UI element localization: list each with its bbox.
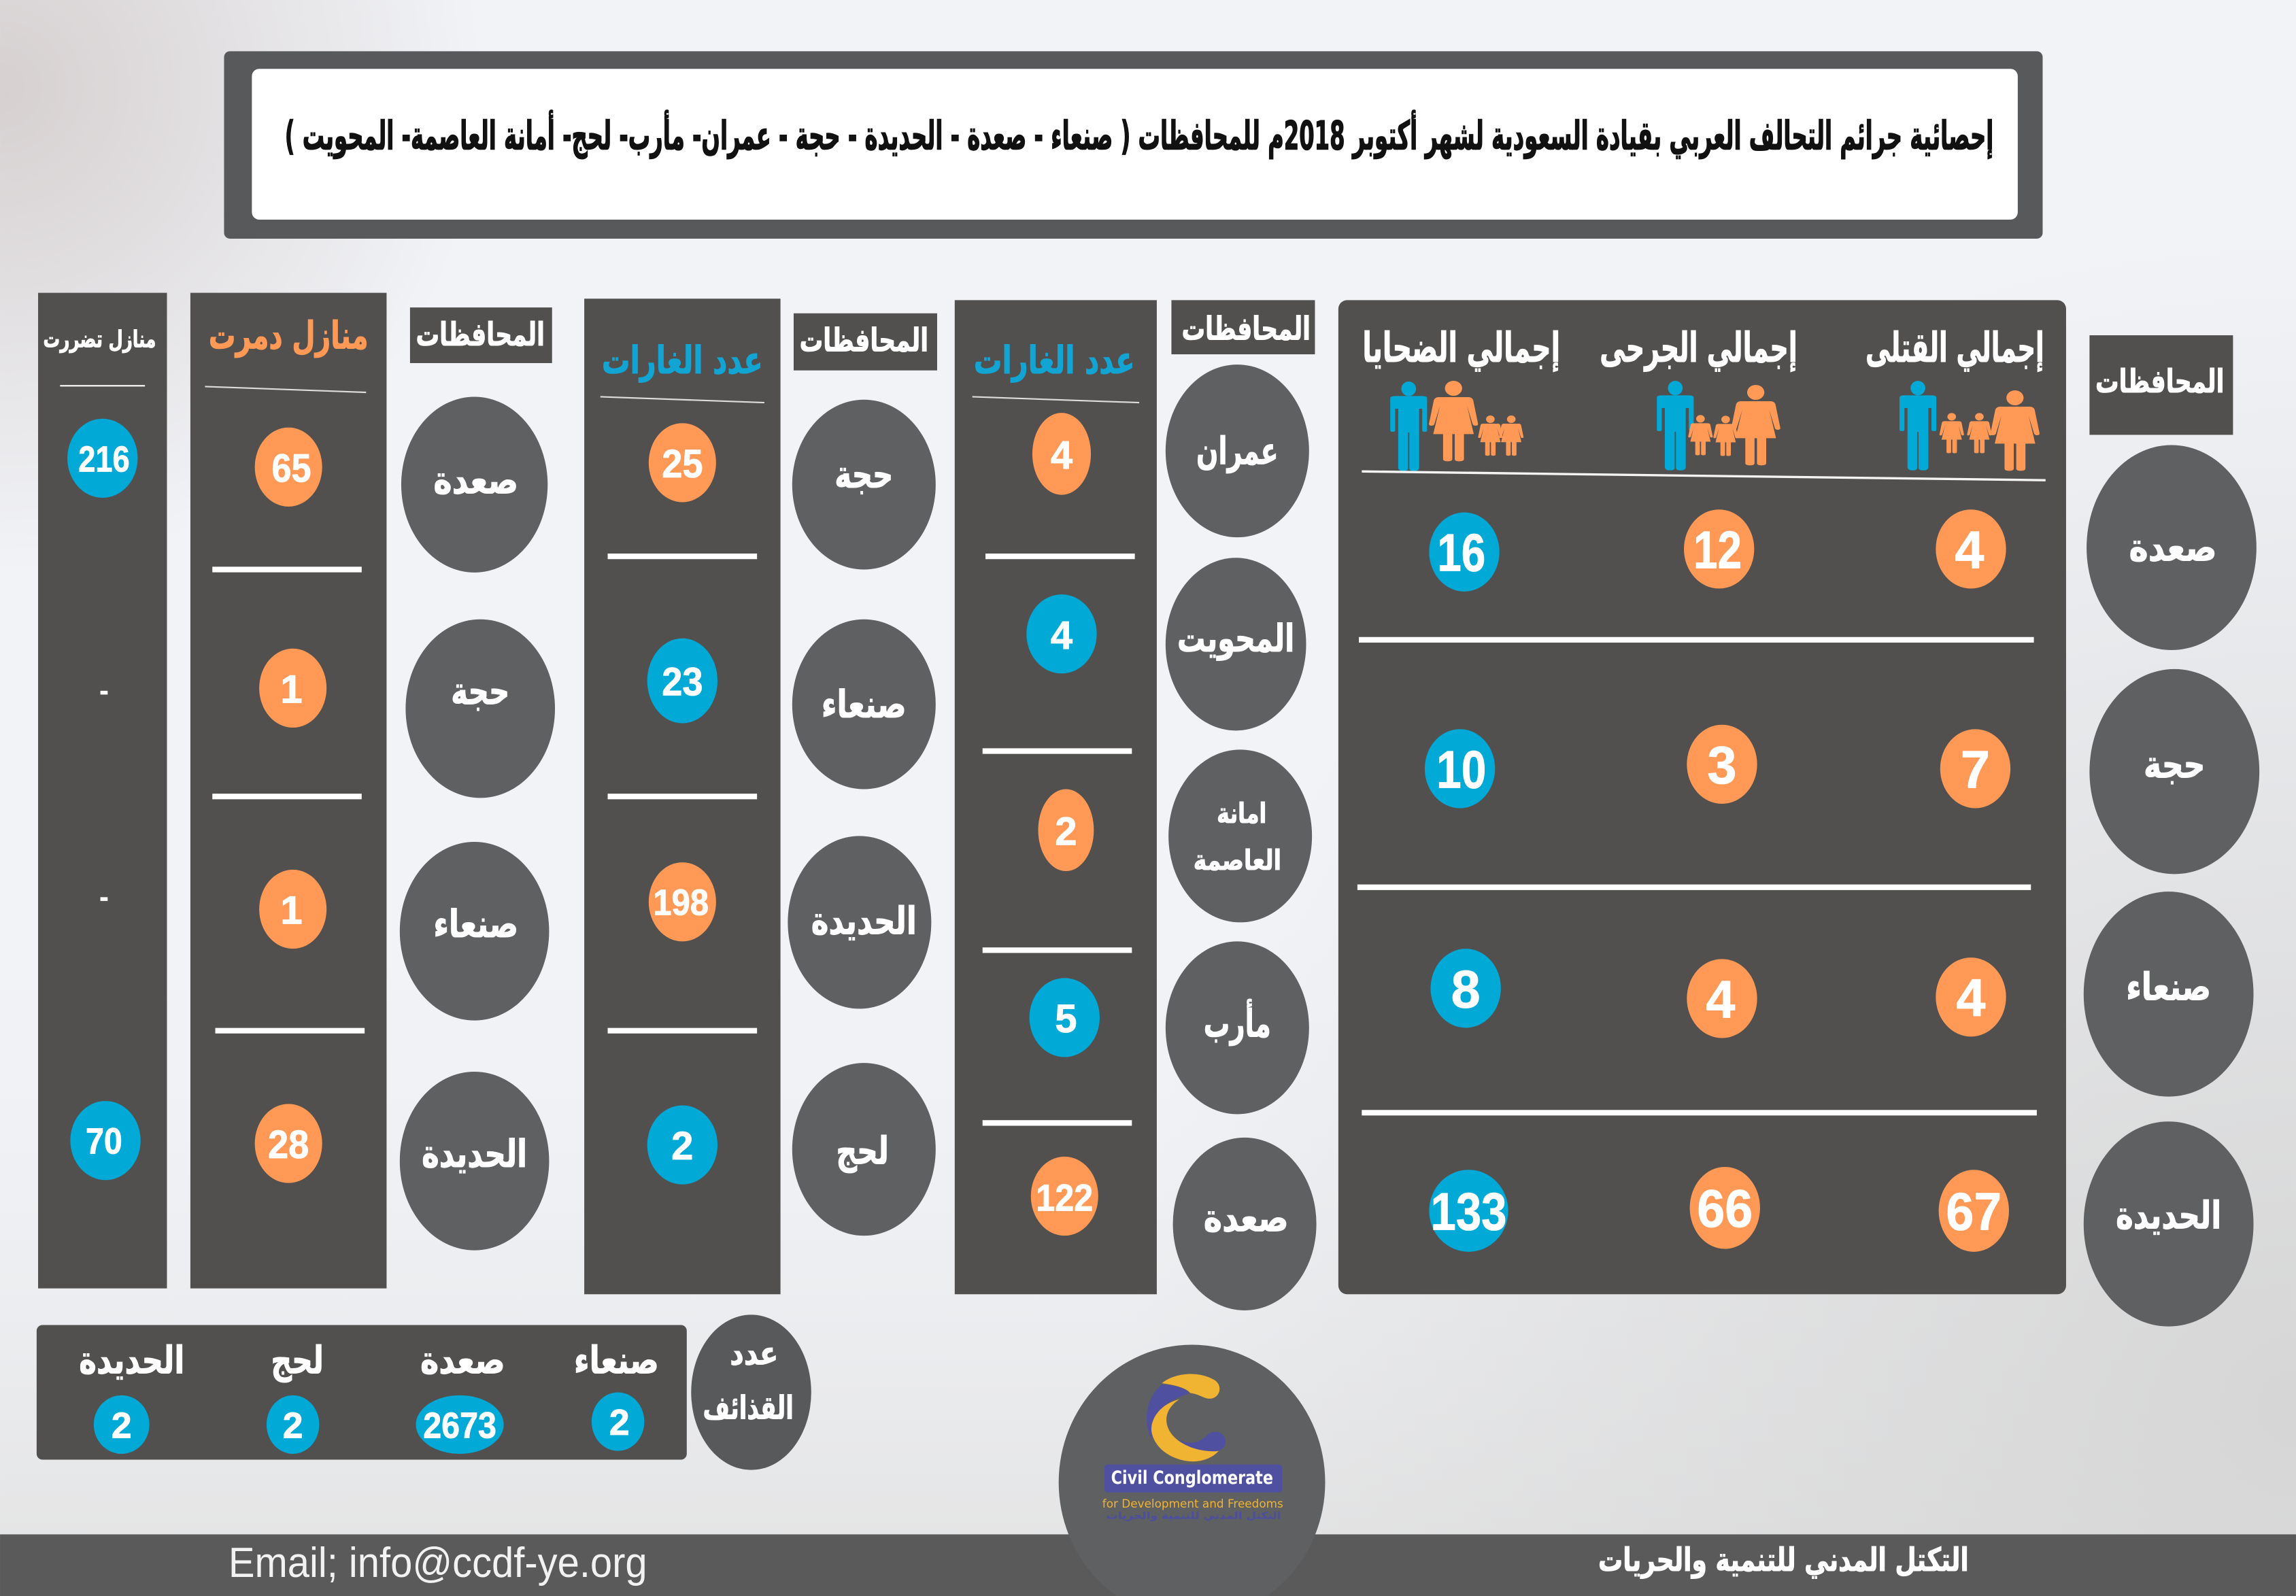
governorate: Hodeidah: الحديدة [2116,1193,2221,1238]
title panel [224,51,2042,239]
heading: damaged houses: منازل تضررت [44,326,156,353]
governorate: Al Mahwit [1166,558,1306,730]
governorate: Saada [401,396,547,573]
governorate: Marib: مأرب [1204,998,1271,1046]
governorate: Sanaa [400,842,549,1021]
footer email: Email; info@ccdf-ye.org [229,1539,647,1586]
shells: Lahj [267,1339,324,1454]
heading: number of raids: عدد الغارات [602,339,763,383]
shells: Lahj: لحج [271,1339,324,1383]
row: Hodeidah values: 133 [1431,1183,1506,1242]
shells label: القذائف [703,1389,794,1427]
governorate: Amran: عمران [1196,430,1279,474]
governorate: Sanaa: صنعاء [822,683,907,727]
governorate: Hajjah: حجة [834,453,893,497]
row: Saada values [1429,509,2006,592]
panel: raids column 2 [955,300,1157,1294]
row: Hajjah values: 3 [1707,736,1737,795]
value: 122: 122 [1036,1176,1093,1219]
heading: total killed: إجمالي القتلى [1866,324,2044,372]
value: 4 [1026,594,1097,673]
governorate: Capital Secretariat: امانة [1217,797,1266,830]
value: 70: 70 [86,1121,122,1162]
governorate: Hajjah: حجة [451,670,509,714]
value: 28: 28 [268,1123,309,1167]
governorate: Hajjah [792,400,936,570]
logo: Civil Conglomerate [1102,1374,1283,1521]
row: Hajjah values: 7 [1961,741,1990,799]
governorate: Saada: صعدة [2129,526,2217,571]
governorates label 2: المحافظات [800,322,928,360]
heading: total wounded: إجمالي الجرحى [1600,324,1797,372]
governorate: Hodeidah [788,836,931,1008]
value: 65 [255,428,322,507]
heading: total victims: إجمالي الضحايا [1362,324,1560,372]
governorates label 4 [2089,335,2233,435]
governorates label 3: المحافظات [1182,310,1311,347]
governorate: Sanaa: صنعاء [433,902,518,947]
value: dash: - [99,677,108,706]
value: 5: 5 [1055,997,1077,1041]
value: 4: 4 [1051,433,1073,477]
governorates label 3 [1171,300,1315,354]
governorate: Saada [2087,445,2257,650]
panel: destroyed houses [190,293,386,1289]
panel: shells [37,1325,687,1460]
panel: raids column 1 [584,299,781,1294]
shells: Hodeidah: الحديدة [79,1339,184,1383]
row: Hodeidah values: 66 [1697,1180,1753,1238]
logo: Civil Conglomerate: التكتل المدني للتنمية والحريات [1107,1510,1281,1521]
row: Saada values: 4 [1955,521,1984,579]
value: 23: 23 [662,660,703,704]
governorate: Capital Secretariat: العاصمة [1194,844,1281,877]
value: 4: 4 [1051,613,1073,658]
governorate: Marib [1166,941,1309,1114]
footer bar [0,1534,2296,1596]
governorate: Lahj [792,1063,936,1236]
value: 23 [647,639,718,724]
logo badge [1059,1345,1326,1596]
value: 4 [1032,413,1091,495]
row: Hajjah values: 10 [1436,741,1486,799]
row: Sanaa values: 4 [1956,969,1986,1028]
governorate: Saada [1173,1138,1317,1310]
value: 2 [647,1106,718,1185]
governorate: Hajjah: حجة [2144,743,2205,787]
heading: number of raids: عدد الغارات [974,339,1135,383]
governorate: Hodeidah: الحديدة [422,1132,527,1176]
footer organisation name: التكتل المدني للتنمية والحريات [1598,1542,1969,1579]
governorates label 1: المحافظات [416,316,545,354]
governorates label 1 [410,307,552,363]
governorate: Saada: صعدة [433,459,518,503]
governorate: Sanaa: صنعاء [2126,966,2211,1010]
row: Sanaa values: 4 [1706,970,1735,1029]
value: 2: 2 [671,1124,694,1168]
shells label: عدد [730,1336,778,1373]
value: 2: 2 [1055,809,1077,853]
shells: Hodeidah [79,1339,184,1454]
shells: Sanaa [574,1339,659,1451]
value: 122 [1031,1157,1098,1236]
row: Sanaa values: 8 [1451,960,1481,1019]
shells: Lahj: 2 [283,1405,303,1446]
shells: Saada [416,1339,505,1454]
row: Saada values: 12 [1693,521,1742,579]
governorate: Al Mahwit: المحويت [1177,617,1294,661]
row: Hodeidah values [1429,1167,2009,1252]
value: 70 [70,1101,141,1180]
value: 1: 1 [280,889,303,933]
row: Hodeidah values: 67 [1946,1183,2002,1242]
icons: family figures [1390,381,2040,471]
governorates label 4: المحافظات [2095,363,2224,401]
shells: Sanaa: 2 [609,1402,630,1443]
governorate: Hodeidah [2084,1121,2254,1327]
value: dash: - [99,883,108,913]
row: Hajjah values [1425,725,2010,808]
value: 198 [649,862,716,941]
value: 216 [67,419,137,498]
value: 25: 25 [662,442,703,486]
governorate: Amran [1166,364,1309,537]
governorates label 2 [794,313,937,371]
heading: destroyed houses: منازل دمرت [209,313,369,358]
value: 25 [649,423,716,502]
value: 198: 198 [653,883,709,923]
governorate: Sanaa [792,619,936,789]
governorate: Capital Secretariat [1168,749,1312,922]
shells: Sanaa: صنعاء [574,1339,659,1383]
value: 216: 216 [78,439,130,479]
governorate: Hodeidah: الحديدة [811,900,917,944]
value: 2 [1039,789,1094,871]
logo: Civil Conglomerate: Civil Conglomerate [1111,1467,1273,1489]
panel: casualties [1338,300,2066,1294]
governorate: Lahj: لحج [836,1130,889,1174]
value: 1 [259,870,326,949]
shells: Saada: صعدة [420,1339,505,1383]
governorate: Hajjah [2089,669,2259,874]
shells label [691,1314,811,1470]
value: 1: 1 [280,667,303,711]
shells: Hodeidah: 2 [112,1405,132,1446]
governorate: Sanaa [2084,892,2254,1097]
value: 1 [259,649,326,728]
value: 5 [1030,978,1100,1057]
value: 28 [255,1104,322,1183]
row: Sanaa values [1431,949,2006,1038]
governorate: Hajjah [405,619,555,798]
panel: damaged houses [38,293,167,1289]
value: 65: 65 [271,446,311,490]
shells: Saada: 2673 [423,1405,496,1446]
logo: Civil Conglomerate: for Development and Freedoms [1102,1497,1283,1510]
governorate: Hodeidah [400,1072,549,1251]
row: Saada values: 16 [1437,524,1485,583]
governorate: Saada: صعدة [1204,1197,1289,1241]
